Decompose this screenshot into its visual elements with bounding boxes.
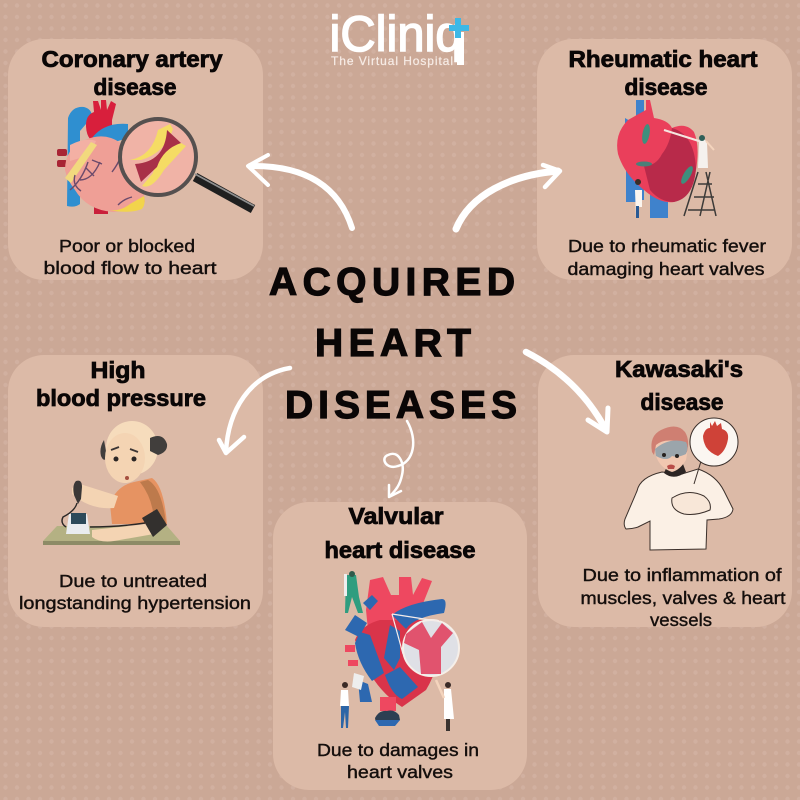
title: acquired heart diseases: DISEASES (285, 384, 517, 427)
arrow: to Kawasaki's disease (526, 352, 608, 432)
icon: man with chest pain and heart bubble (624, 418, 738, 550)
arrow: to rheumatic heart disease (456, 165, 560, 229)
title: acquired heart diseases: ACQUIRED (269, 261, 515, 304)
panel: coronary artery disease (8, 39, 263, 280)
logo: iCliniq: The Virtual Hospital (331, 54, 453, 68)
heading: valvular heart disease: heart disease (324, 537, 476, 563)
description: Due to untreated (59, 571, 207, 591)
panel: high blood pressure (8, 355, 263, 627)
heading: valvular heart disease: Valvular (348, 503, 444, 529)
icon: heart with doctors and magnified valve (340, 571, 459, 731)
description: blood flow to heart (44, 258, 217, 278)
icon: heart with doctors on ladder (617, 100, 716, 218)
panel: Kawasaki's disease (538, 355, 792, 630)
description: longstanding hypertension (19, 593, 251, 613)
arrow: to valvular heart disease (384, 421, 413, 497)
description: muscles, valves & heart (580, 588, 786, 608)
heading: Kawasaki's disease: Kawasaki's (615, 356, 743, 382)
panel: valvular heart disease (273, 502, 527, 790)
arrow: to high blood pressure (219, 368, 290, 453)
arrow: to coronary artery disease (248, 155, 352, 228)
title: acquired heart diseases (269, 261, 517, 427)
heading: coronary artery disease: disease (94, 74, 176, 100)
heading: high blood pressure: High (90, 357, 146, 383)
title: acquired heart diseases: HEART (315, 322, 471, 365)
panel: rheumatic heart disease (537, 39, 792, 280)
logo: iCliniq: iCliniq (330, 6, 462, 62)
description: Due to damages in (317, 740, 479, 760)
description: damaging heart valves (568, 259, 765, 279)
heading: rheumatic heart disease: Rheumatic heart (568, 46, 758, 72)
description: vessels (650, 610, 712, 630)
description: Due to inflammation of (582, 565, 782, 585)
description: heart valves (347, 762, 453, 782)
heading: rheumatic heart disease: disease (624, 74, 708, 100)
heading: Kawasaki's disease: disease (640, 389, 724, 415)
heading: coronary artery disease: Coronary artery (42, 46, 223, 72)
heading: high blood pressure: blood pressure (36, 385, 206, 411)
icon: heart with magnifying glass (57, 100, 254, 214)
description: Due to rheumatic fever (568, 236, 766, 256)
icon: man measuring blood pressure (43, 421, 180, 545)
description: Poor or blocked (59, 236, 195, 256)
